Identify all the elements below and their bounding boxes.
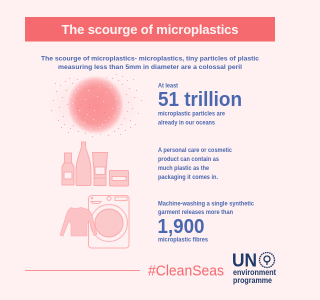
tall bottle <box>76 142 91 186</box>
stat: 51 trillion: 51 trillion <box>158 88 242 111</box>
stat: 1,900 fibres: garment releases more than <box>158 209 233 216</box>
stat: 1,900 fibres: Machine-washing a single synthetic <box>158 200 254 208</box>
stat: 51 trillion: already in our oceans <box>158 120 215 126</box>
intro text: The scourge of microplastics- microplastics, tiny particles of plastic <box>41 56 259 62</box>
icon: microplastic particle cloud <box>49 74 142 137</box>
stat: 51 trillion: microplastic particles are <box>158 110 225 118</box>
logo: UN environment programme: environment <box>233 268 276 277</box>
tube <box>92 152 108 186</box>
intro text: measuring less than 5mm in diameter are a colossal peril <box>58 64 242 71</box>
hashtag: #CleanSeas <box>148 262 224 280</box>
icon: UN emblem <box>260 252 274 268</box>
icon: sweater <box>60 208 97 236</box>
spray bottle <box>62 153 74 185</box>
icon: washing machine <box>88 196 129 248</box>
footer rule <box>25 270 140 271</box>
logo: UN environment programme: UN <box>232 250 257 270</box>
stat: personal care text: much plastic as the <box>158 165 209 172</box>
intro text <box>41 56 259 71</box>
stat: personal care text: product can contain as <box>158 156 219 163</box>
logo: UN environment programme: programme <box>233 276 273 285</box>
stat: 51 trillion: At least <box>158 82 179 90</box>
stat: personal care text: A personal care or cosmetic <box>158 147 232 154</box>
stat: personal care text <box>158 147 232 181</box>
title banner: The scourge of microplastics <box>62 22 238 37</box>
stat: 1,900 fibres: 1,900 <box>158 215 204 238</box>
icon: cosmetic bottles <box>62 142 128 186</box>
title banner <box>25 17 275 42</box>
stat: personal care text: packaging it comes in. <box>158 174 218 181</box>
stat: 1,900 fibres <box>158 200 254 244</box>
jar <box>110 170 128 186</box>
stat: 51 trillion <box>158 82 242 126</box>
stat: 1,900 fibres: microplastic fibres <box>158 236 208 244</box>
logo: UN environment programme <box>232 250 276 285</box>
